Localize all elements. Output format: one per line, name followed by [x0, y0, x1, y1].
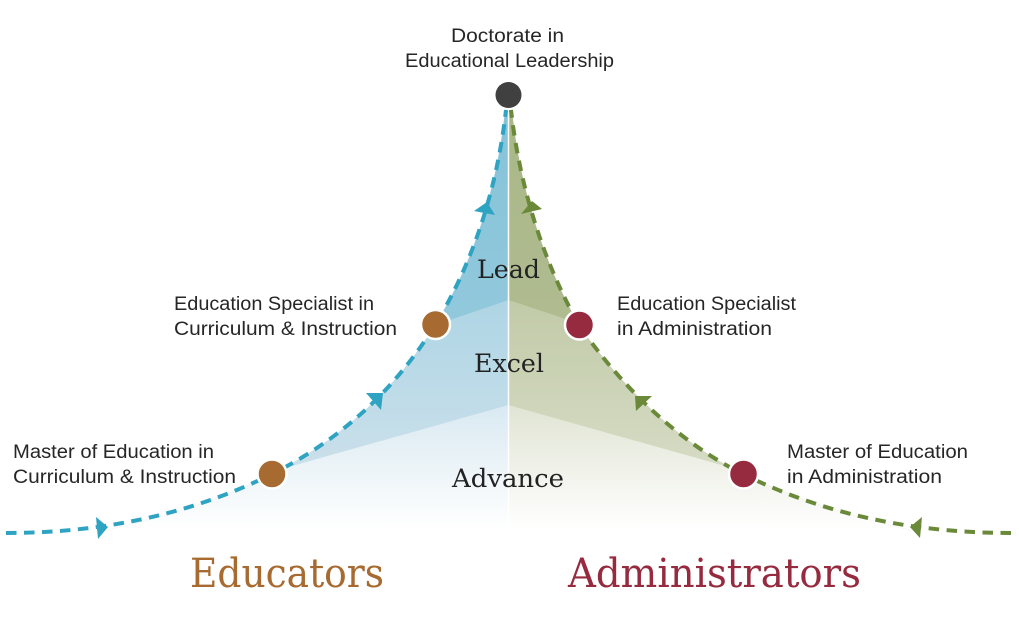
label: doctorate: Doctorate in — [451, 26, 564, 47]
label: advance: Advance — [451, 464, 564, 493]
arrow: administrators middle — [635, 396, 652, 411]
node: educators specialist — [421, 310, 450, 339]
arrow: administrators upper — [521, 201, 542, 214]
node: educators master — [258, 460, 286, 488]
node: doctorate — [496, 82, 522, 108]
label: doctorate: Educational Leadership — [405, 51, 614, 72]
arrow: educators middle — [366, 393, 383, 410]
panel: administrators area — [508, 100, 919, 535]
label: master curriculum: Master of Education in — [13, 442, 214, 463]
label: education specialist curriculum: Curriculum & Instruction — [174, 319, 397, 340]
heading: educators: Educators — [190, 551, 384, 597]
node: administrators specialist — [565, 310, 594, 340]
arrow: educators upper — [474, 202, 495, 215]
arrow: administrators lower — [910, 517, 922, 538]
label: excel: Excel — [474, 349, 544, 378]
node: administrators master — [729, 460, 758, 488]
label: master administration: Master of Education — [787, 442, 968, 463]
label: education specialist curriculum: Education Specialist in — [174, 294, 374, 315]
arrow: educators lower — [96, 517, 108, 539]
panel: educators area — [100, 100, 509, 535]
label: master administration: in Administration — [787, 467, 942, 488]
heading: administrators: Administrators — [567, 551, 861, 597]
label: education specialist administration: in Administration — [617, 319, 772, 340]
label: education specialist administration: Education Specialist — [617, 294, 797, 315]
label: lead: Lead — [477, 255, 540, 284]
educators dashed path — [6, 110, 506, 533]
label: master curriculum: Curriculum & Instruction — [13, 467, 236, 488]
administrators dashed path — [511, 110, 1011, 533]
